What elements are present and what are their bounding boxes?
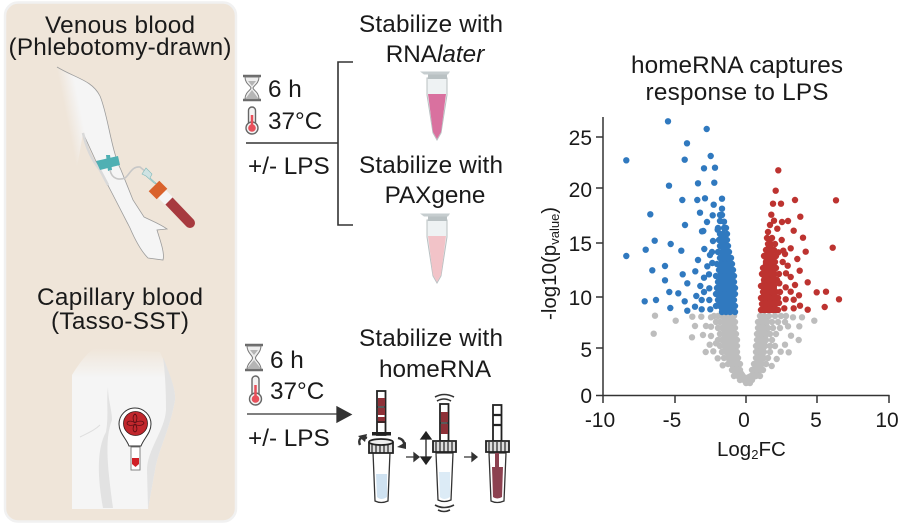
chart title: response to LPS	[646, 79, 828, 106]
x tick labels: 10	[875, 409, 899, 432]
heading: stabilize with PAXgene: PAXgene	[385, 182, 485, 209]
x axis title: FC	[758, 438, 786, 461]
y axis title: value	[547, 214, 562, 245]
heading: capillary blood: (Tasso-SST)	[51, 308, 189, 335]
icon: arm with phlebotomy set	[57, 67, 190, 260]
downregulated genes (blue)	[626, 121, 736, 314]
icon: hourglass bottom	[245, 345, 263, 370]
x axis title: Log	[717, 438, 751, 461]
shoulder	[72, 348, 175, 509]
arrow: step 2 to 3	[464, 453, 477, 461]
axes and ticks	[596, 117, 890, 403]
x tick labels: 0	[738, 409, 750, 432]
icon: upper arm with Tasso device	[72, 348, 175, 509]
arrow: shake up and down	[421, 432, 431, 464]
label: LPS top: +/- LPS	[248, 153, 330, 180]
chart title: homeRNA captures	[631, 52, 843, 79]
icon: hourglass top	[243, 76, 261, 100]
y axis title: -log10(p	[538, 245, 561, 320]
icon: homeRNA device step 3	[486, 405, 509, 502]
heading: stabilize with PAXgene	[359, 152, 503, 209]
label: 6 h top: 6 h	[268, 76, 302, 103]
icon: thermometer bottom	[250, 376, 262, 405]
y tick labels: 20	[569, 179, 592, 202]
heading: stabilize with homeRNA: homeRNA	[379, 356, 492, 383]
upregulated genes (red)	[761, 170, 839, 313]
y tick labels: 15	[569, 233, 592, 256]
non-significant genes (grey)	[654, 316, 814, 386]
arm	[57, 67, 167, 260]
heading: stabilize with RNAlater: Stabilize with	[359, 11, 503, 38]
arrow: to homeRNA	[247, 407, 351, 422]
heading: capillary blood: Capillary blood	[37, 284, 203, 311]
heading: stabilize with RNAlater: RNAlater	[386, 41, 485, 68]
x tick labels	[585, 409, 899, 432]
icon: RNAlater tube	[420, 72, 450, 140]
y tick labels: 10	[569, 287, 592, 310]
y tick labels: 25	[569, 127, 592, 150]
tubing	[110, 167, 146, 179]
icon: homeRNA device step 2	[433, 394, 456, 512]
x axis title: 2	[751, 447, 758, 462]
x tick labels: 5	[810, 409, 822, 432]
y tick labels: 5	[580, 339, 592, 362]
collection tube	[131, 447, 140, 470]
arrow: step 1 to 2	[406, 453, 419, 461]
label: 6 h bottom: 6 h	[270, 347, 304, 374]
x tick labels: -10	[585, 409, 615, 432]
x tick labels: -5	[663, 409, 681, 432]
icon: thermometer top	[246, 107, 258, 134]
heading: stabilize with homeRNA: Stabilize with	[359, 325, 503, 352]
device body	[119, 408, 151, 446]
icon: PAXgene tube	[420, 214, 450, 283]
volcano plot	[538, 117, 899, 462]
label: 37°C top: 37°C	[268, 108, 322, 135]
panel: blood sources	[5, 2, 236, 522]
heading: stabilize with RNAlater	[359, 11, 503, 68]
bracket: split to stabilizers	[246, 62, 353, 225]
y tick labels	[569, 127, 592, 408]
needle hub	[142, 168, 158, 185]
heading: stabilize with homeRNA	[359, 325, 503, 383]
chart title	[631, 52, 843, 106]
heading: venous blood	[8, 12, 232, 61]
y tick labels: 0	[580, 385, 592, 408]
blood collection tube	[168, 200, 190, 223]
label: LPS bottom: +/- LPS	[248, 425, 330, 452]
y axis title: )	[538, 207, 561, 214]
device red button	[124, 412, 148, 436]
heading: venous blood: (Phlebotomy-drawn)	[8, 34, 232, 61]
label: 37°C bottom: 37°C	[270, 378, 324, 405]
heading: capillary blood	[37, 284, 203, 335]
tourniquet	[96, 155, 120, 171]
heading: stabilize with PAXgene: Stabilize with	[359, 152, 503, 179]
heading: venous blood: Venous blood	[45, 12, 195, 39]
icon: homeRNA device step 1	[358, 391, 406, 502]
